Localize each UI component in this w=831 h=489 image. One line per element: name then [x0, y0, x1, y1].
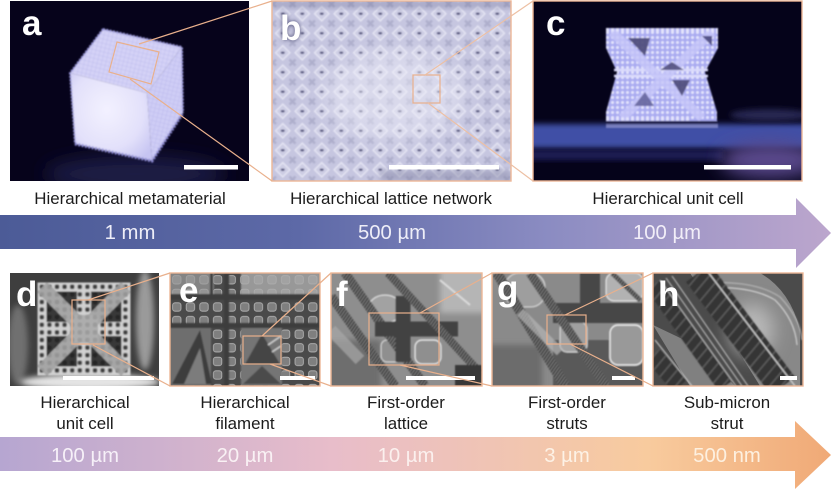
- scale label 3 µm: 3 µm: [544, 445, 590, 467]
- scale bar b: [389, 165, 499, 170]
- scale bar c: [704, 165, 791, 170]
- icon: unit cell hourglass: [606, 28, 718, 128]
- panel b: hierarchical lattice network photo: [272, 1, 511, 181]
- panel c: hierarchical unit cell photo: [523, 1, 820, 181]
- connector lines d to e: [88, 273, 170, 386]
- scale label 500 µm: 500 µm: [358, 222, 426, 244]
- inset box a: [109, 42, 159, 84]
- caption g: First-order: [528, 393, 606, 412]
- inset box d: [72, 300, 105, 344]
- caption b: Hierarchical lattice network: [290, 189, 492, 208]
- panel g: first-order struts SEM: [482, 269, 643, 390]
- panel a: hierarchical metamaterial photo: [10, 1, 249, 192]
- inset box e: [243, 336, 281, 364]
- inset box g: [547, 315, 586, 344]
- panel h: sub-micron strut SEM: [653, 272, 803, 386]
- caption g: struts: [546, 414, 588, 433]
- caption f: First-order: [367, 393, 445, 412]
- caption c: Hierarchical unit cell: [592, 189, 744, 208]
- scale label 20 µm: 20 µm: [217, 445, 273, 467]
- panel letter g: g: [497, 269, 518, 308]
- caption d: Hierarchical: [40, 393, 130, 412]
- panel letter c: c: [546, 4, 565, 43]
- inset box f: [369, 313, 439, 365]
- caption h: Sub-micron: [684, 393, 770, 412]
- connector lines f to g: [400, 273, 492, 386]
- scale arrow top: [0, 198, 831, 268]
- scale bar d: [63, 376, 154, 380]
- scale bar h: [780, 376, 797, 380]
- caption e: Hierarchical: [200, 393, 290, 412]
- scale label 500 nm: 500 nm: [693, 445, 761, 467]
- scale label 1 mm: 1 mm: [105, 222, 155, 244]
- scale bar a: [184, 165, 238, 170]
- caption e: filament: [215, 414, 275, 433]
- panel letter h: h: [658, 275, 679, 314]
- connector lines g to h: [565, 273, 653, 386]
- panel letter d: d: [16, 275, 37, 314]
- caption h: strut: [711, 414, 744, 433]
- scale label 10 µm: 10 µm: [378, 445, 434, 467]
- inset box b: [413, 75, 440, 103]
- caption d: unit cell: [56, 414, 114, 433]
- panel f: first-order lattice SEM: [321, 268, 486, 390]
- panel letter e: e: [179, 271, 198, 310]
- scale arrow bottom: [0, 421, 831, 489]
- scale bar e: [280, 376, 315, 380]
- panel letter f: f: [336, 275, 348, 314]
- connector lines e to f: [262, 273, 331, 386]
- scale label 100 µm: 100 µm: [51, 445, 119, 467]
- panel letter a: a: [22, 4, 42, 43]
- scale bar g: [612, 376, 635, 380]
- caption a: Hierarchical metamaterial: [34, 189, 226, 208]
- panel e: hierarchical filament SEM: [170, 271, 320, 386]
- panel letter b: b: [280, 9, 301, 48]
- scale bar f: [406, 376, 475, 380]
- icon: lattice cube: [70, 29, 183, 161]
- connector lines b to c: [425, 1, 533, 181]
- connector lines a to b: [130, 1, 272, 181]
- scale label 100 µm: 100 µm: [633, 222, 701, 244]
- panel d: unit cell SEM: [8, 270, 160, 390]
- caption f: lattice: [384, 414, 428, 433]
